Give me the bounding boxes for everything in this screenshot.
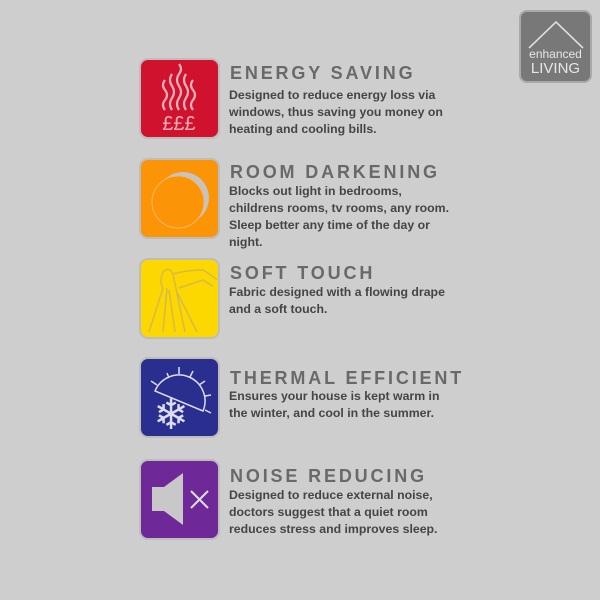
icon: soft touch	[139, 258, 220, 339]
text: room darkening: Blocks out light in bedrooms,	[229, 184, 402, 198]
text: soft touch: and a soft touch.	[229, 302, 327, 316]
logo: enhanced	[529, 47, 582, 61]
text: noise reducing: reduces stress and improves sleep.	[229, 522, 437, 536]
icon: energy saving: £££	[162, 113, 196, 135]
heading: room darkening: ROOM DARKENING	[230, 162, 440, 182]
text: soft touch: Fabric designed with a flowing drape	[229, 285, 445, 299]
text: energy saving: windows, thus saving you money on	[229, 105, 443, 119]
icon: room darkening	[139, 158, 220, 239]
text: thermal efficient: Ensures your house is kept warm in	[229, 389, 439, 403]
text: energy saving	[229, 88, 443, 136]
text: noise reducing: Designed to reduce external noise,	[229, 488, 433, 502]
text: room darkening: Sleep better any time of the day or	[229, 218, 430, 232]
text: noise reducing: doctors suggest that a quiet room	[229, 505, 428, 519]
heading: noise reducing: NOISE REDUCING	[230, 466, 427, 486]
text: energy saving: Designed to reduce energy loss via	[229, 88, 435, 102]
text: room darkening	[229, 184, 449, 249]
logo: LIVING	[531, 60, 580, 77]
text: thermal efficient	[229, 389, 439, 420]
text: soft touch	[229, 285, 445, 316]
icon: thermal efficient	[139, 357, 220, 438]
text: energy saving: heating and cooling bills.	[229, 122, 377, 136]
heading: thermal efficient: THERMAL EFFICIENT	[230, 368, 464, 388]
logo	[519, 10, 592, 83]
icon: noise reducing	[139, 459, 220, 540]
icon: energy saving	[139, 58, 220, 139]
text: thermal efficient: the winter, and cool in the summer.	[229, 406, 434, 420]
heading: energy saving: ENERGY SAVING	[230, 63, 415, 83]
text: room darkening: childrens rooms, tv rooms, any room.	[229, 201, 449, 215]
text: noise reducing	[229, 488, 437, 536]
heading: soft touch: SOFT TOUCH	[230, 263, 375, 283]
text: room darkening: night.	[229, 235, 262, 249]
